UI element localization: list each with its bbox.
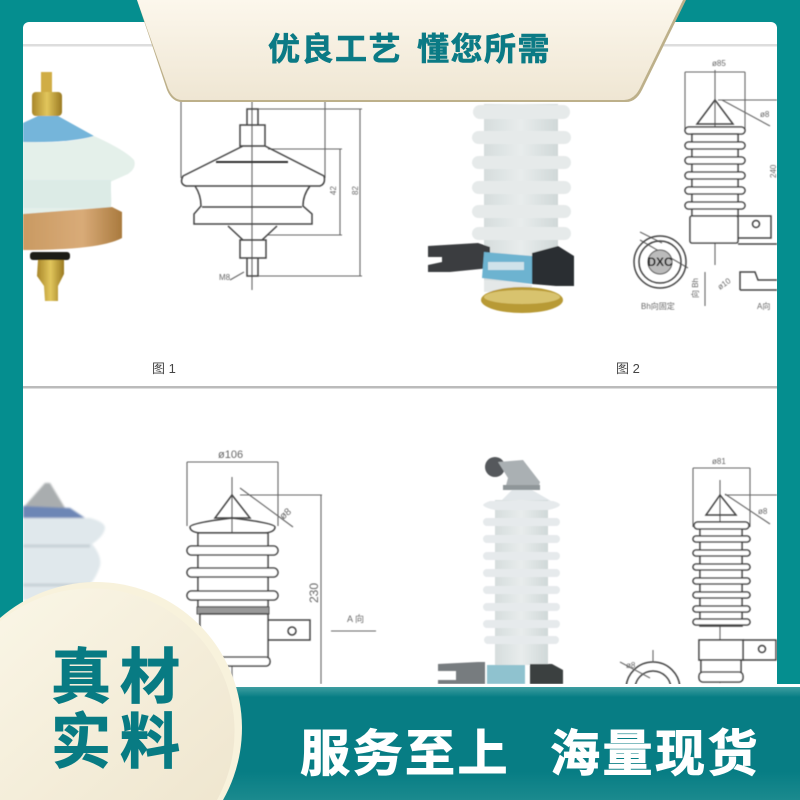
drawing: figure 4: ø81 [712,457,726,466]
drawing: figure 2: A向 [757,301,770,311]
photo: lower left arrester [23,483,105,600]
white gap above bottom band [0,684,800,687]
drawing: figure 3: 230 [307,583,321,603]
slogan: stock: 海量现货 [550,726,760,782]
drawing: figure 1: 42 [329,186,338,195]
drawing: figure 3 [187,449,376,684]
photo: polymer arrester with bracket [428,104,574,313]
badge: genuine materials [0,582,242,800]
drawing: figure 4: ø8 [626,661,636,670]
drawing: figure 2 [634,59,778,311]
slogan: service: 服务至上 [300,726,510,782]
drawing: figure 2: Bh向固定 [641,301,675,311]
drawing: figure 3: ø8 [278,506,294,522]
caption: figure 2: 图 2 [616,361,640,376]
drawing: figure 4 [619,457,777,684]
drawing: figure 3: ø106 [218,449,243,461]
photo: tall polymer arrester [438,457,563,684]
drawing: figure 2: 240 [769,164,778,178]
badge text line 1: 真材 [51,644,189,711]
drawing: figure 2: 向 Bh [690,278,700,298]
drawing: figure 4: ø8 [758,507,768,516]
drawing: figure 2: DXC [647,255,673,269]
banner subtitle: 懂您所需 [417,31,551,67]
drawing: figure 2: ø85 [712,59,726,68]
header banner [137,0,686,102]
drawing: figure 3: A 向 [347,613,364,624]
caption: figure 1: 图 1 [152,361,176,376]
drawing: figure 2: ø10 [716,276,733,292]
drawing: figure 1: 82 [351,186,360,195]
badge text line 2: 实料 [51,709,189,776]
banner title: 优良工艺 [268,31,402,67]
drawing: figure 1 [181,90,362,290]
bottom band [0,687,800,800]
photo: disc arrester [23,72,135,301]
drawing: figure 1: M8 [219,273,231,282]
drawing: figure 2: ø8 [760,110,770,119]
